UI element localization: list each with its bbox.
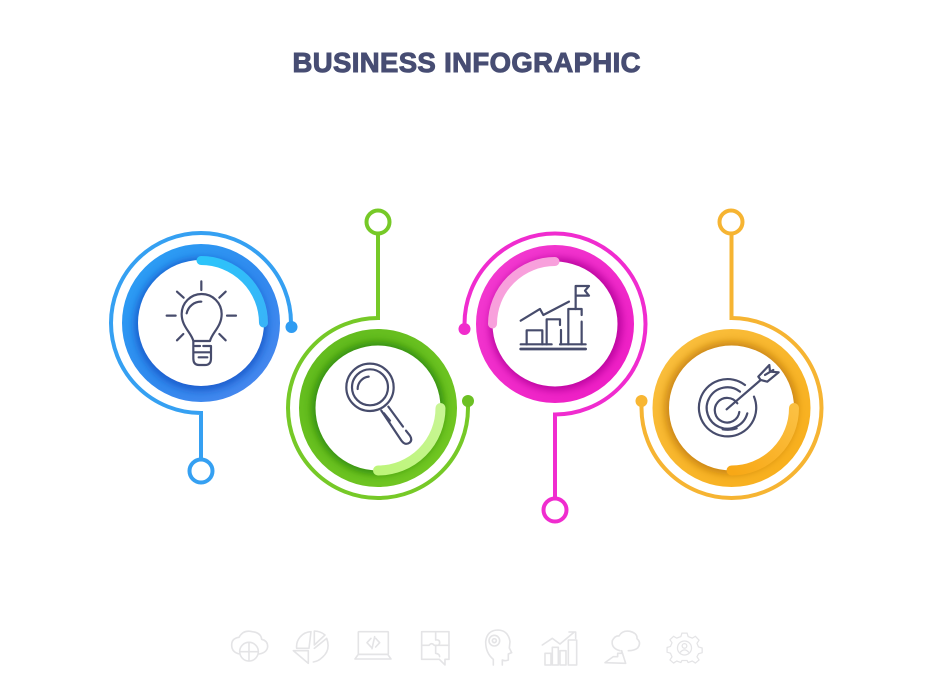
magenta ring — [484, 254, 626, 394]
icon: lightbulb — [167, 281, 236, 365]
connector line with dot and node — [458, 234, 646, 522]
icon: cloud with stairs — [605, 631, 639, 663]
icon: puzzle — [422, 632, 449, 665]
icon: magnifying glass — [346, 364, 411, 444]
highlight arc — [732, 408, 794, 471]
connector line with dot and node — [288, 210, 474, 498]
green ring — [308, 338, 448, 478]
orange ring — [661, 338, 802, 478]
icon: head with gear — [486, 630, 512, 665]
panel: orange target step — [636, 210, 822, 498]
icon: pie chart — [293, 631, 328, 663]
icon: growth chart with flag — [521, 286, 589, 349]
icon: rising bar chart — [542, 632, 577, 665]
highlight arc — [378, 408, 440, 471]
panel: magenta chart step — [458, 234, 646, 522]
icon: cloud network — [232, 631, 268, 661]
connector line with dot and node — [111, 233, 298, 482]
connector line with dot and node — [636, 210, 822, 498]
icon: target with arrow — [699, 365, 779, 436]
highlight arc — [492, 262, 555, 324]
icon: laptop with code — [355, 632, 391, 659]
title: BUSINESS INFOGRAPHIC — [292, 47, 641, 78]
icon row: faded business icons — [232, 630, 702, 665]
panel: green magnifier step — [288, 210, 474, 498]
panel: blue lightbulb step — [111, 233, 298, 482]
blue ring — [130, 252, 272, 394]
highlight arc — [201, 260, 264, 323]
icon: gear with person — [667, 633, 702, 663]
